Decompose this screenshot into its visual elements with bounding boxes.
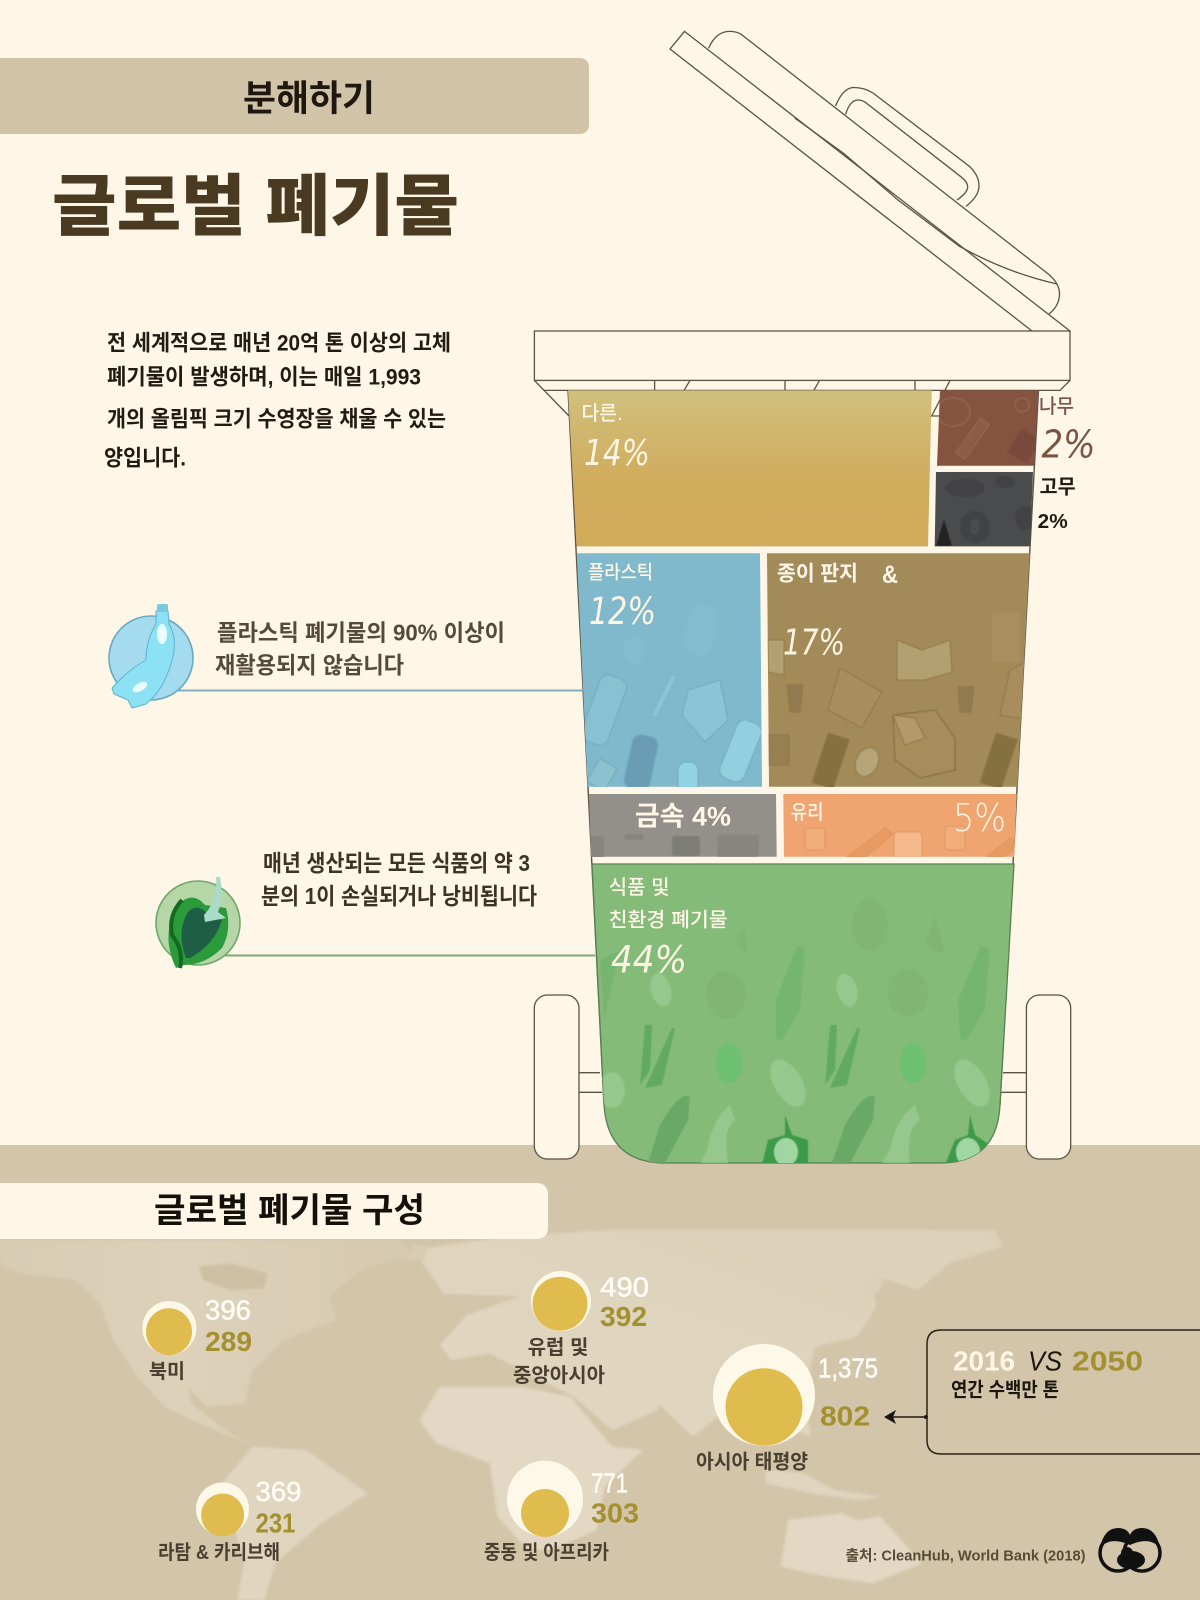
- value glass: 5%: [953, 796, 1006, 840]
- label rubber: [1038, 476, 1076, 533]
- callout text food: [261, 850, 537, 909]
- bubble: Europe and Central Asia: 유럽 및: [528, 1336, 588, 1359]
- block: plastic: [577, 553, 764, 792]
- callout text food: 매년 생산되는 모든 식품의 약 3: [263, 850, 530, 876]
- label glass: 유리: [791, 801, 824, 824]
- value plastic: 12%: [589, 590, 656, 633]
- label wood: 2%: [1042, 423, 1096, 467]
- bin side edges: [568, 390, 1038, 1105]
- callout: plastic: [109, 604, 583, 708]
- bubble: Middle East and Africa: 303: [591, 1498, 639, 1528]
- callout text plastic: [215, 620, 505, 678]
- section heading: 글로벌 폐기물 구성: [154, 1192, 425, 1230]
- intro paragraph: 개의 올림픽 크기 수영장을 채울 수 있는: [107, 406, 446, 432]
- value other: 14%: [584, 433, 650, 474]
- bubble: Latin America and Caribbean: 라탐 & 카리브해: [158, 1541, 280, 1564]
- header label: 분해하기: [243, 78, 375, 118]
- block: other 14%: [568, 390, 932, 546]
- bubble: Latin America and Caribbean: [158, 1476, 302, 1564]
- bubble: Latin America and Caribbean: 369: [256, 1476, 302, 1507]
- bubble: Middle East and Africa: 중동 및 아프리카: [484, 1541, 609, 1564]
- bubble: North America: 북미: [149, 1360, 185, 1383]
- label rubber: 2%: [1038, 511, 1068, 533]
- block: paper and cardboard: [767, 553, 1030, 789]
- bin rim: [534, 331, 1070, 416]
- bubble: Asia Pacific: [696, 1344, 878, 1474]
- section heading: [0, 1183, 548, 1239]
- intro paragraph: 양입니다.: [104, 446, 186, 470]
- label rubber: 고무: [1040, 476, 1076, 498]
- callout text plastic: 플라스틱 폐기물의 90% 이상이: [217, 620, 505, 646]
- label plastic: 플라스틱: [588, 562, 653, 584]
- block: metal: [589, 794, 777, 858]
- block: food and green waste: [592, 864, 1014, 1166]
- block: glass: [783, 794, 1020, 862]
- value food: 44%: [611, 938, 687, 982]
- label paper: 종이 판지: [777, 562, 858, 586]
- value paper: 17%: [783, 622, 845, 664]
- bubble: Europe and Central Asia: 중앙아시아: [513, 1364, 605, 1387]
- top header bar: [0, 58, 589, 134]
- title: 글로벌 폐기물: [52, 170, 459, 244]
- block: rubber: [935, 472, 1035, 546]
- label food: 식품 및: [609, 876, 670, 899]
- label metal: 금속 4%: [635, 802, 731, 832]
- callout text plastic: 재활용되지 않습니다: [215, 652, 404, 678]
- ground band: [0, 1145, 1200, 1600]
- legend box: 2016: [953, 1346, 1015, 1376]
- bubble: Latin America and Caribbean: 231: [256, 1508, 296, 1538]
- logo: [1100, 1528, 1160, 1571]
- legend box: [927, 1330, 1200, 1454]
- block: food and green waste: 친환경 폐기물: [609, 909, 728, 932]
- callout text food: 분의 1이 손실되거나 낭비됩니다: [261, 883, 537, 909]
- legend box: 2050: [1072, 1346, 1143, 1376]
- bin lid: [670, 31, 1070, 331]
- intro paragraph: [104, 330, 451, 470]
- icon: green pepper: [156, 877, 240, 968]
- block: wood: [936, 390, 1041, 466]
- intro paragraph: 전 세계적으로 매년 20억 톤 이상의 고체: [107, 330, 451, 356]
- callout: food: [156, 850, 595, 968]
- bubble: North America: 396: [205, 1294, 251, 1326]
- bubble: Europe and Central Asia: [513, 1271, 649, 1387]
- icon: plastic bottle: [109, 604, 193, 708]
- bubble: North America: [142, 1294, 252, 1383]
- bubble: Middle East and Africa: [484, 1461, 639, 1564]
- bubble: Asia Pacific: 802: [820, 1400, 870, 1432]
- legend box: 연간 수백만 톤: [951, 1379, 1059, 1402]
- bubble: Europe and Central Asia: 490: [600, 1272, 649, 1302]
- bubble: Europe and Central Asia: 392: [600, 1301, 647, 1332]
- bubble: Middle East and Africa: 771: [591, 1468, 628, 1498]
- label wood: 나무: [1039, 395, 1074, 418]
- ampersand: &: [882, 561, 898, 589]
- bubble: North America: 289: [205, 1326, 252, 1357]
- wheels and axles: [534, 995, 1071, 1159]
- intro paragraph: 폐기물이 발생하며, 이는 매일 1,993: [107, 364, 421, 390]
- label wood: [1039, 395, 1096, 467]
- source: 출처: CleanHub, World Bank (2018): [846, 1548, 1086, 1564]
- arrow to legend: [884, 1410, 928, 1424]
- bubble: Asia Pacific: 아시아 태평양: [696, 1451, 808, 1474]
- world map: [0, 1230, 1003, 1600]
- legend box: VS: [1028, 1346, 1062, 1376]
- bubble: Asia Pacific: 1,375: [818, 1352, 878, 1384]
- label other: 다른.: [582, 402, 622, 425]
